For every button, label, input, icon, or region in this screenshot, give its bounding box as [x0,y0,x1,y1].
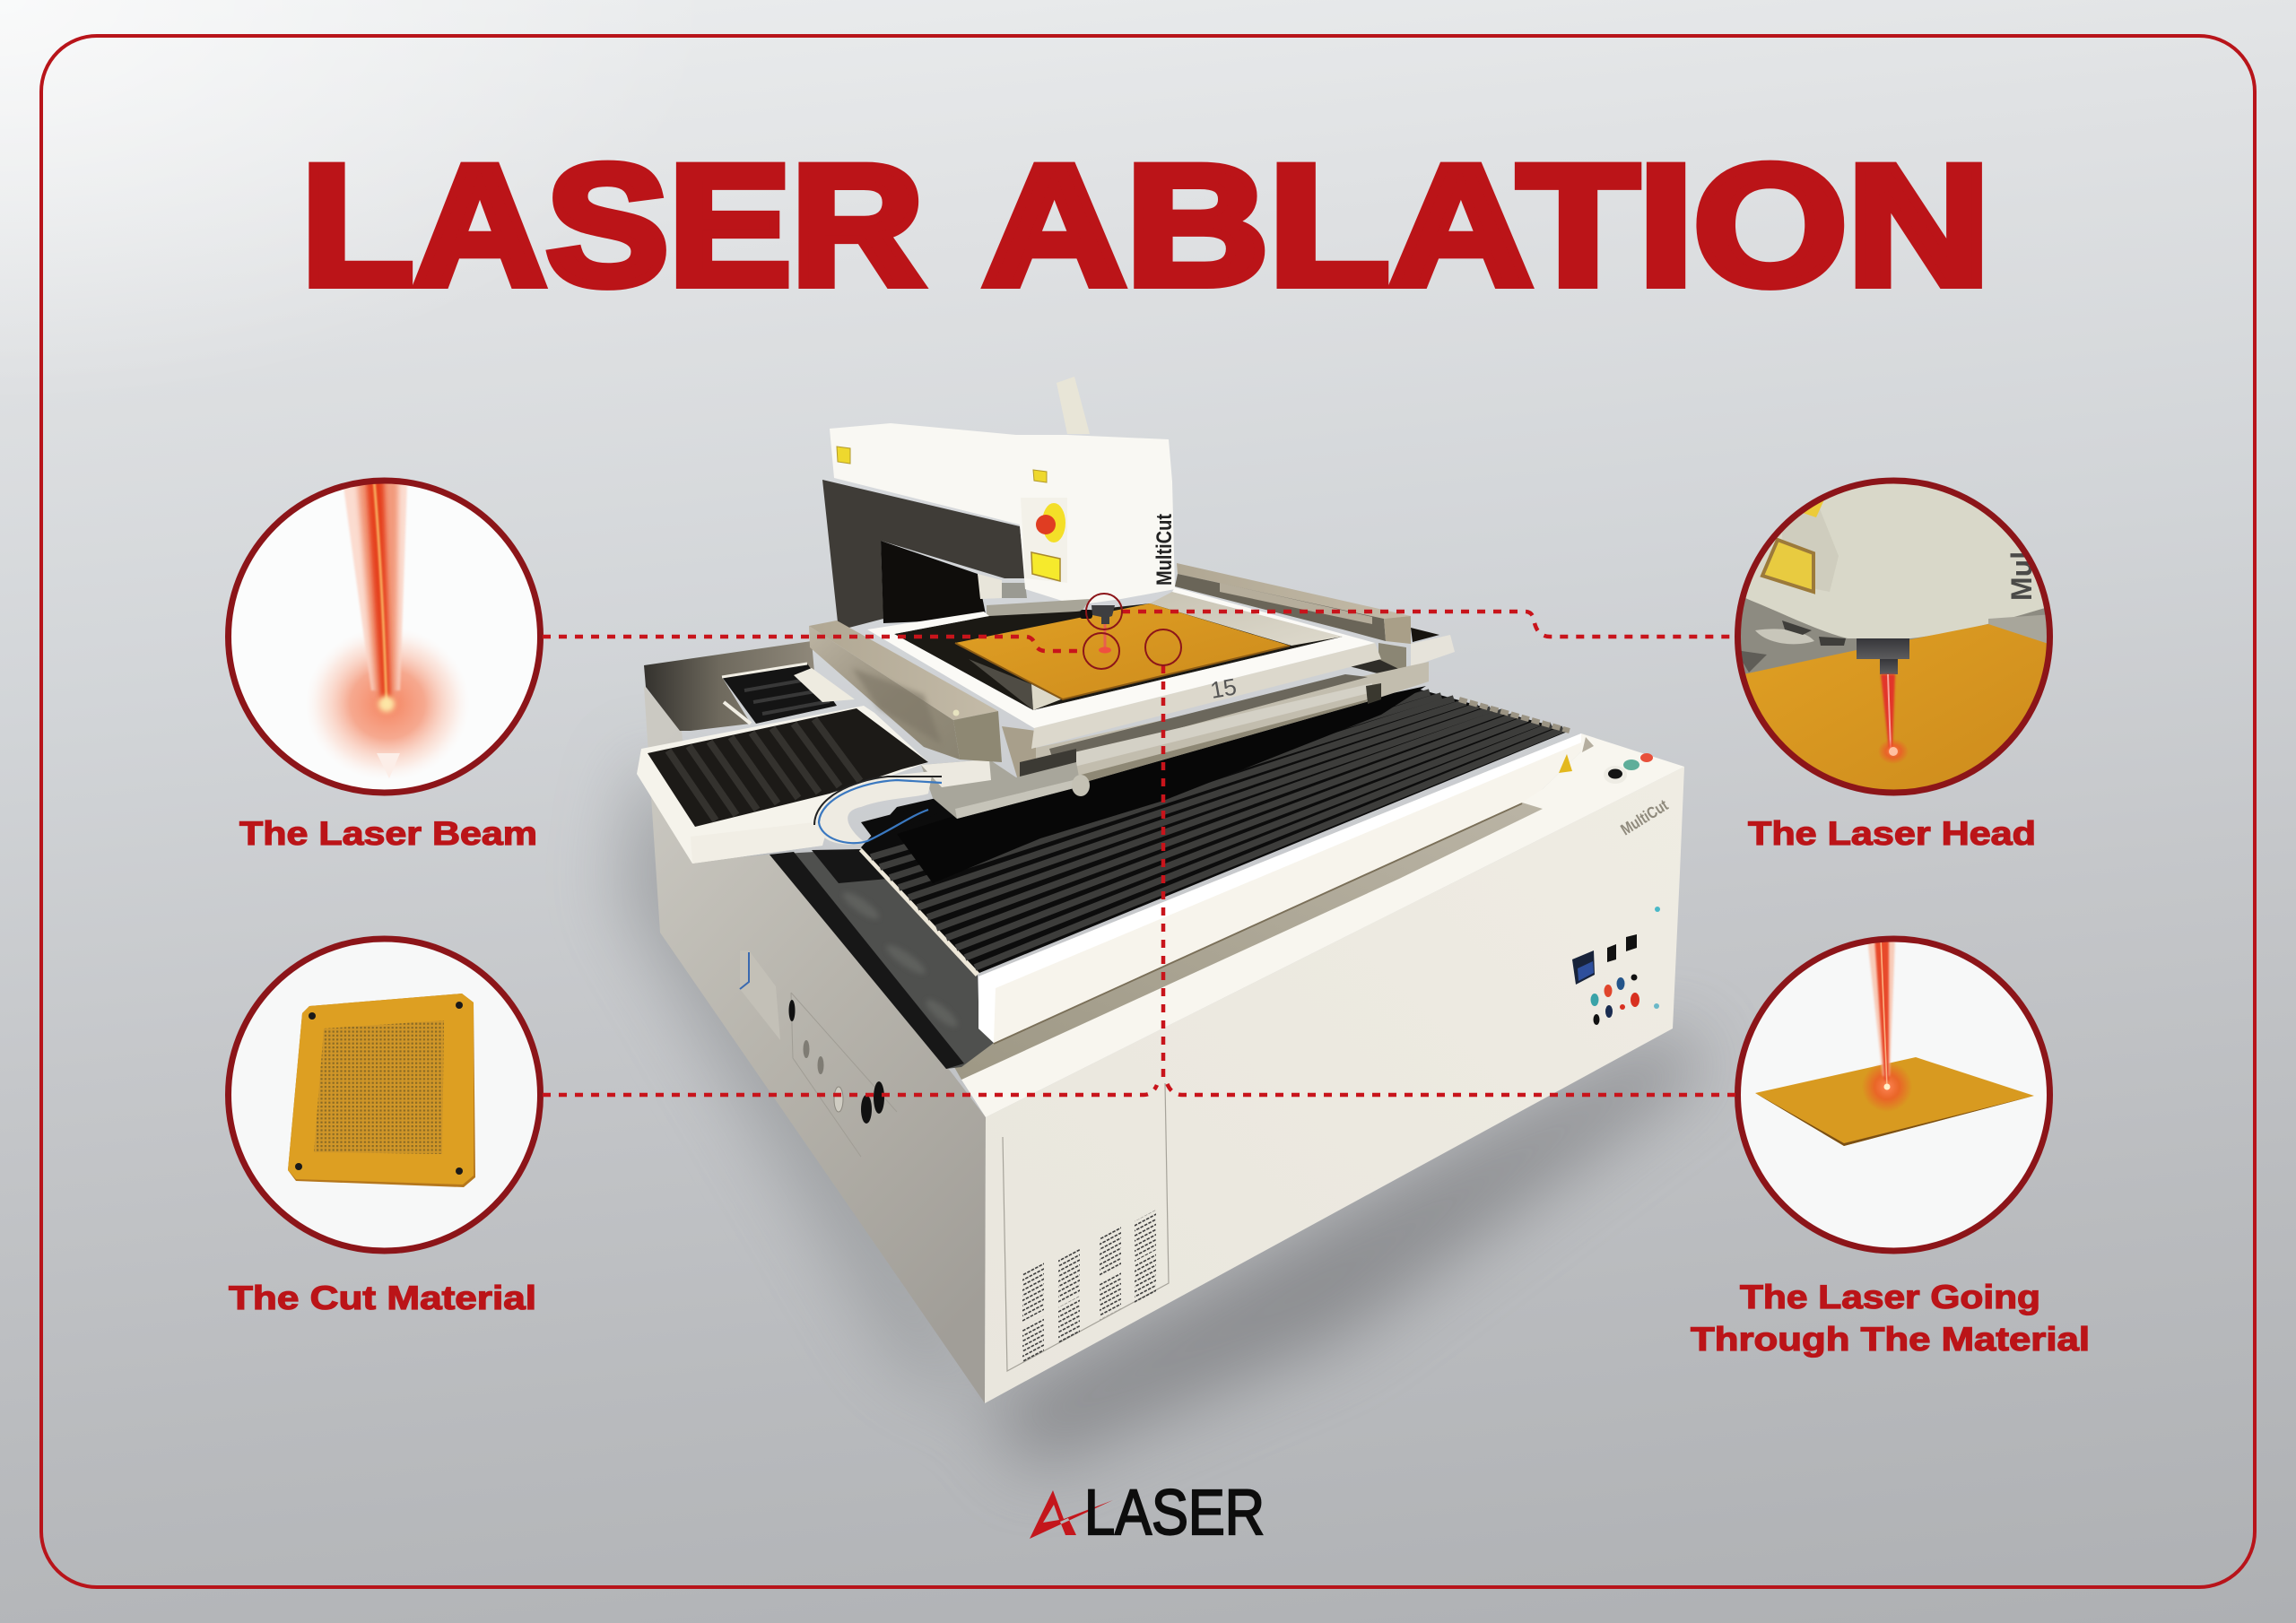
lower rails [1002,662,1429,798]
main bellows [861,686,1570,973]
laser nozzle [1080,605,1115,653]
label: the laser head: The Laser Head [1748,815,2036,852]
control panel [1572,907,1660,1025]
label: the laser going through the material: Through The Material [1691,1321,2090,1358]
rear white block [794,668,855,702]
dark side strip [770,849,994,1069]
panel: the laser going through the material [1738,937,2050,1251]
orange material sheet [955,603,1290,699]
label: the laser going through the material [1691,1279,2090,1358]
laser cutting machine [637,377,1684,1403]
beam on sheet illustration [1755,937,2034,1146]
title [301,130,1990,321]
front access panel outline [1003,1083,1169,1371]
head close-up illustration: Mul [2005,551,2038,601]
callout ring: head [1086,594,1122,629]
logo wordmark: LASER [1084,1478,1265,1549]
front lip [978,733,1581,1043]
callout ring: material [1145,629,1181,665]
lower carriage [921,759,1090,819]
left gantry beam [809,621,1002,762]
label: the cut material: The Cut Material [229,1280,536,1316]
callout ring: beam [1083,633,1119,669]
panel: the cut material [228,939,540,1251]
cabinet front face [985,767,1684,1403]
rear deck [644,641,814,731]
ventilation slots [1022,1210,1156,1364]
head close-up illustration [1741,500,2047,789]
hose and cables [814,771,942,845]
arm opening [881,541,1027,623]
tan wedge [1582,737,1594,752]
MultiCut head label: MultiCut [1152,514,1177,586]
warning triangle [1559,754,1572,773]
perforated plate [288,994,475,1187]
dashed connector lines [543,612,1735,1095]
label: the laser beam: The Laser Beam [239,815,537,852]
laser head housing [830,377,1175,605]
label: the laser going through the material: The Laser Going [1740,1279,2040,1315]
cabinet left face [644,686,986,1403]
beam illustration [313,484,463,778]
rear bellows [722,664,837,724]
left side port details [740,950,897,1157]
handwritten 15 on frame: 15 [1208,673,1239,704]
top buttons [1604,753,1653,784]
top surface [961,733,1684,1117]
head rear arm [822,480,1025,630]
rail end handle [1345,628,1455,679]
MultiCut cabinet label: MultiCut [1618,796,1671,838]
title: LASER [301,130,924,321]
title: ABLATION [983,130,1990,321]
panel: the laser head [1731,481,2063,807]
machine shadow [619,753,1704,1471]
logo [1030,1478,1265,1549]
right rail [1175,563,1411,644]
logo mark [1030,1490,1113,1539]
white material frame [867,587,1381,749]
groove [954,803,1543,1080]
side tray [637,706,928,864]
panel: the laser beam [228,480,540,793]
